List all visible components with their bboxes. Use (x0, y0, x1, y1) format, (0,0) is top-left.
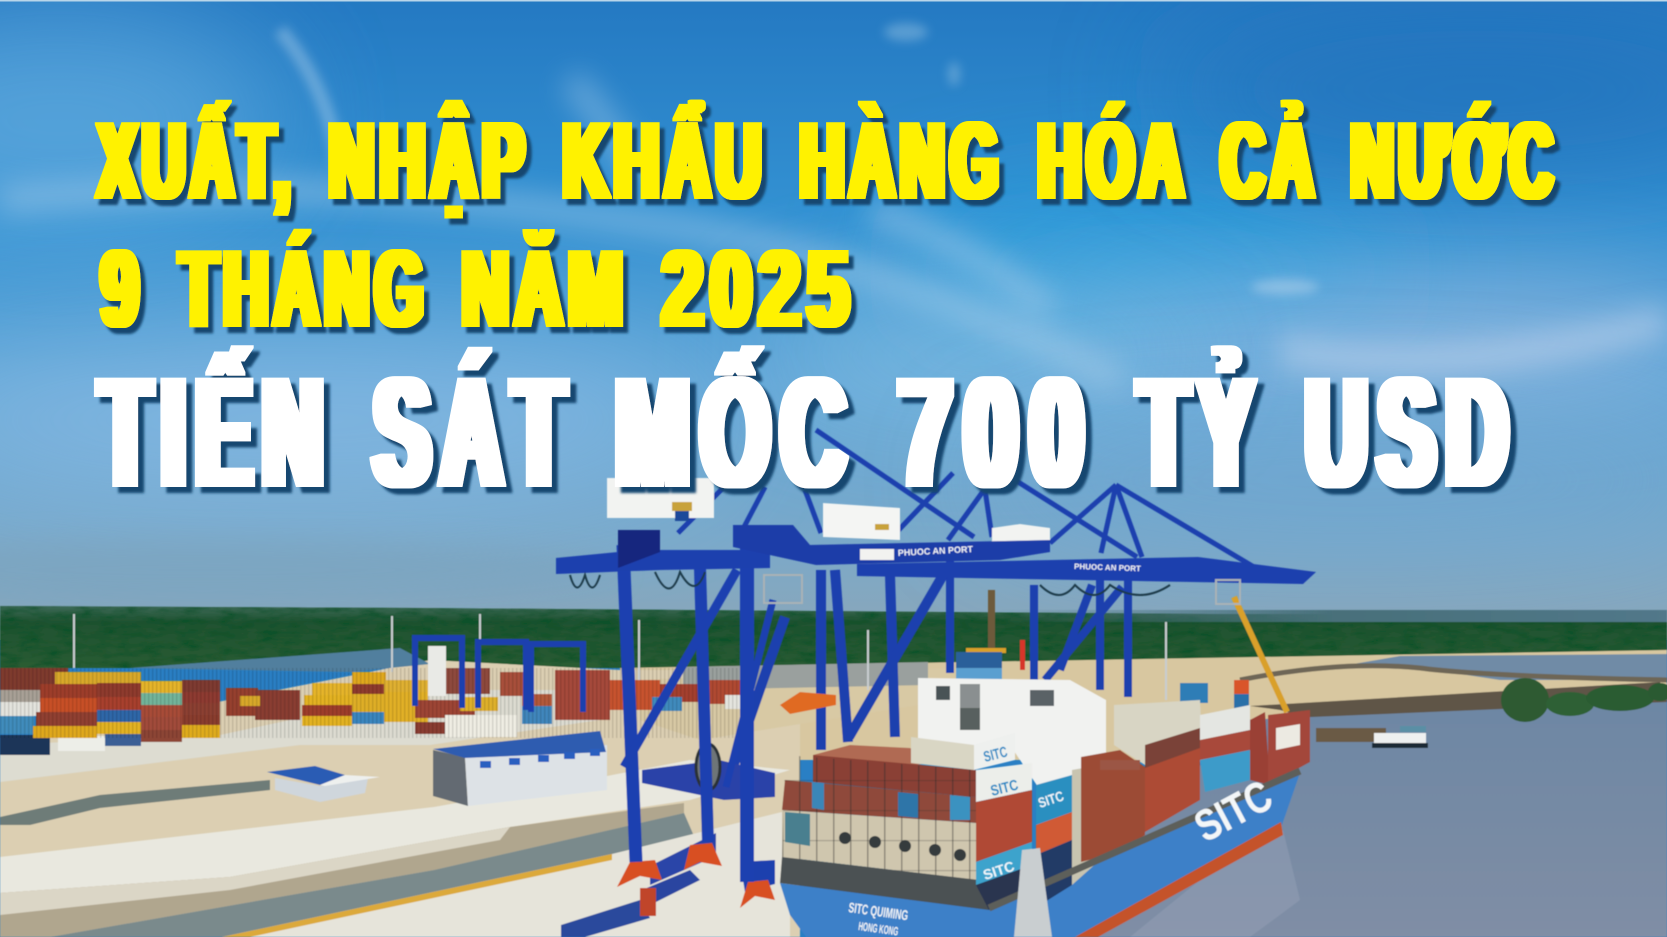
stern rows (782, 780, 976, 823)
warehouse (433, 731, 607, 806)
SITC marks on containers: SITC (989, 777, 1020, 800)
orange crane bogies and trucks on the quay (561, 833, 775, 937)
quay-side blue container stacks (1180, 680, 1249, 710)
left yard, ground and canal (0, 648, 950, 937)
deck equipment and lifeboat (1072, 765, 1100, 885)
light poles (74, 614, 1166, 710)
red waterline stripe (1075, 822, 1283, 937)
title line 2: yellow date: 9 (101, 228, 145, 350)
ship: SITC (981, 858, 1016, 883)
title line 3: white headline: MỐC (616, 346, 857, 520)
reefer containers (911, 737, 974, 770)
hull name (848, 771, 1280, 937)
top container blocks in stern stack (813, 745, 935, 782)
white machine houses on cranes (607, 478, 1050, 542)
title line 1: yellow heading (98, 100, 1558, 222)
SITC marks on containers (982, 744, 1020, 800)
port sign on beam (860, 549, 894, 560)
festoon cables (570, 572, 1170, 595)
mid containers (1081, 750, 1145, 862)
crane boom stays (678, 430, 1254, 567)
small blue-roofed office (267, 766, 380, 802)
SITC marks on containers: SITC (982, 744, 1009, 766)
deck rail (989, 771, 1300, 908)
title line 3: white headline: TIẾN (100, 346, 334, 520)
front crane gantry: PHUOC AN PORT (1074, 562, 1141, 573)
title line 2: yellow date: THÁNG (180, 228, 429, 350)
title line 3: white headline: 700 (899, 346, 1096, 520)
main crane legs (623, 545, 773, 882)
tugboat mast at ship side (1014, 848, 1052, 937)
title line 1: yellow heading: XUẤT, (98, 100, 296, 222)
hull name: SITC (1187, 771, 1280, 852)
container stacks in the yard (0, 668, 747, 755)
back crane gantry structures (678, 430, 1254, 787)
mangrove trees (1501, 678, 1667, 722)
yellow crawler crane (1234, 597, 1287, 712)
crane bridge connecting quay legs (642, 760, 775, 800)
title line 3: white headline: SÁT (374, 346, 576, 520)
right side sand flats and river (620, 650, 1667, 937)
ship (780, 652, 1310, 937)
title line 3: white headline (100, 346, 1519, 520)
title line 1: yellow heading: HÓA (1038, 100, 1189, 222)
side containers near stern (976, 763, 1032, 802)
hull name: SITC QUIMING (848, 899, 909, 923)
ship: SITC (1036, 788, 1066, 811)
title line 2: yellow date: NĂM (462, 228, 629, 350)
main beams (556, 530, 770, 574)
cable reel (696, 744, 720, 790)
front crane gantry (556, 525, 1316, 882)
orange spreader (780, 692, 836, 714)
sky with clouds (0, 0, 1667, 640)
front crane gantry: PHUOC AN PORT (898, 544, 974, 558)
superstructure (918, 652, 1106, 790)
crane legs back (950, 560, 1128, 697)
title line 1: yellow heading: HÀNG (800, 100, 1004, 222)
rubber-tyred gantry cranes in the yard (415, 638, 583, 712)
barge and tug (1316, 726, 1428, 748)
title line 1: yellow heading: CẢ (1221, 100, 1319, 222)
stern container colour accents (785, 782, 970, 861)
title line 3: white headline: TỶ (1139, 346, 1264, 520)
title line 2: yellow date: 2025 (662, 228, 856, 350)
ship hull (780, 773, 1300, 937)
title line 1: yellow heading: KHẨU (563, 100, 767, 222)
trolley cages (764, 575, 1240, 604)
forest on the horizon (0, 606, 1667, 668)
title line 2: yellow date (101, 228, 856, 350)
title line 1: yellow heading: NHẬP (329, 100, 530, 222)
mast and flag behind the ship (966, 590, 1025, 670)
